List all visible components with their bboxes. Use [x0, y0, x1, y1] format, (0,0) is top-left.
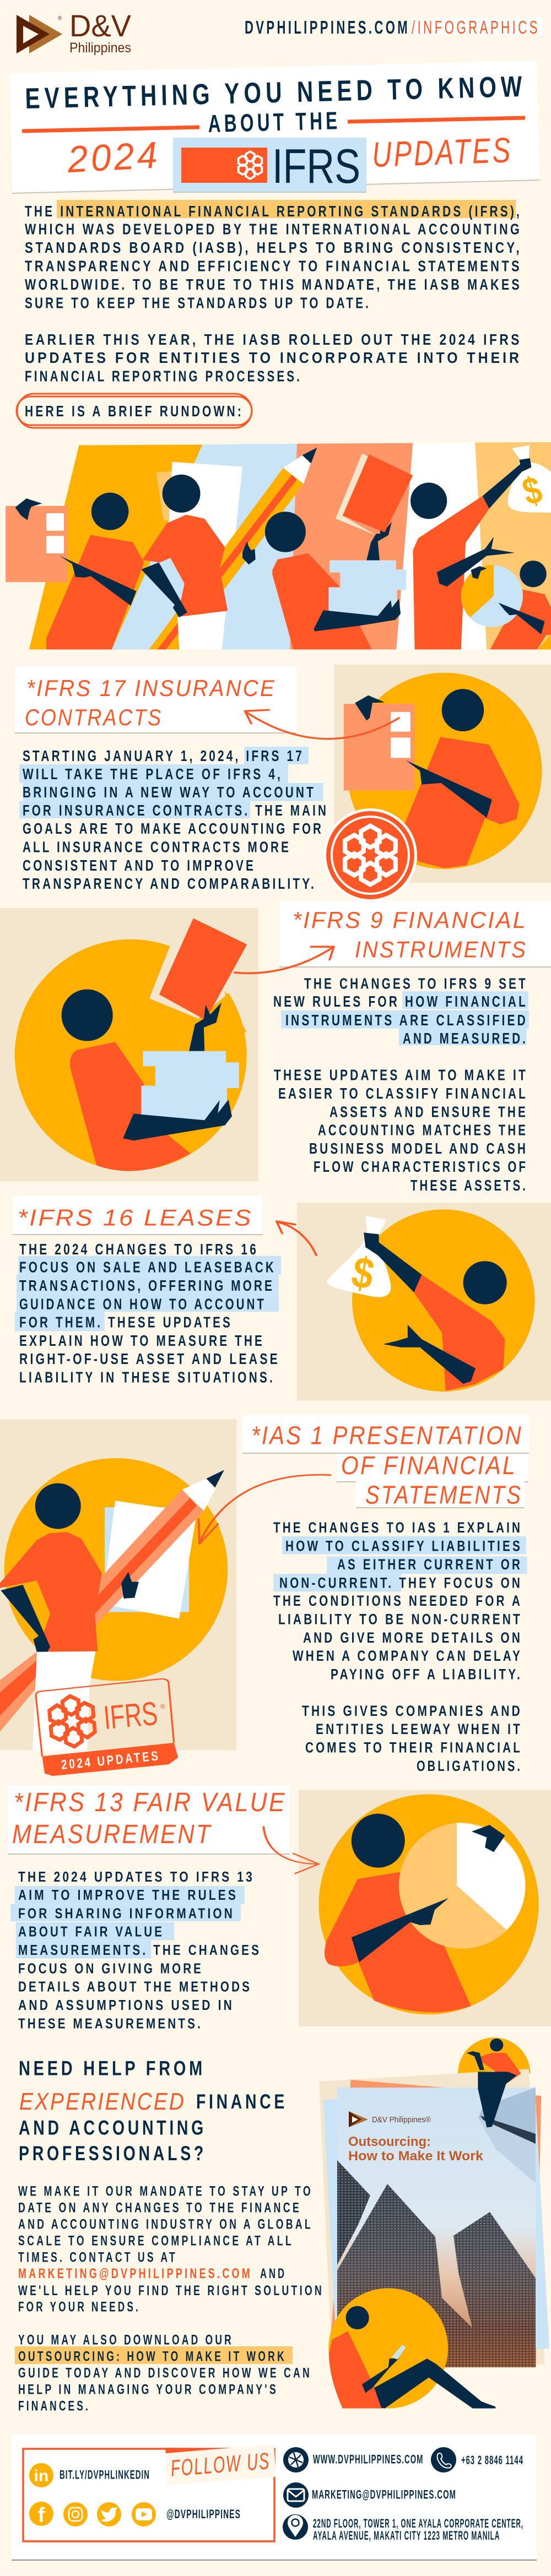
panel: IFRS 13 illustration — [299, 1790, 551, 2026]
cta text: HELP IN MANAGING YOUR COMPANY'S — [18, 2382, 278, 2398]
heading card: IFRS 9 financial instruments: *IFRS 9 FINANCIAL — [293, 907, 527, 933]
heading card: IFRS 17 insurance contracts: CONTRACTS — [25, 704, 163, 730]
cta heading: FINANCE — [196, 2090, 288, 2113]
social frame — [23, 2444, 276, 2541]
title line: about the: ABOUT THE — [208, 106, 341, 138]
heading card: IFRS 16 leases — [13, 1195, 263, 1235]
cta text: WE MAKE IT OUR MANDATE TO STAY UP TO — [18, 2184, 313, 2199]
logo: D&V Philippines: Philippines — [69, 40, 131, 56]
text: IFRS 16: FOCUS ON SALE AND LEASEBACK — [19, 1259, 276, 1275]
intro text — [25, 200, 522, 384]
person 1 — [6, 493, 144, 649]
panel: IFRS 16 illustration: $ — [348, 1247, 378, 1299]
text: IFRS 13: ABOUT FAIR VALUE — [18, 1923, 164, 1939]
cta heading — [19, 2057, 288, 2165]
text: IFRS 16: EXPLAIN HOW TO MEASURE THE — [19, 1332, 264, 1349]
arrow: IFRS 16 — [277, 1221, 316, 1256]
person 3 with book and boxes — [265, 454, 413, 649]
heading card: IFRS 17 insurance contracts — [15, 667, 296, 733]
person 5 with pie chart — [461, 561, 551, 649]
heading card: IAS 1 presentation of financial statements — [242, 1415, 529, 1509]
person 4 with money bag — [410, 445, 551, 649]
title: IFRS logo box: IFRS — [272, 139, 360, 193]
heading card: IAS 1 presentation of financial statements: OF FINANCIAL — [341, 1451, 517, 1480]
heading card: IFRS 16 leases: *IFRS 16 LEASES — [18, 1205, 253, 1230]
text: IFRS 13: AND ASSUMPTIONS USED IN — [18, 1997, 234, 2013]
cta heading: EXPERIENCED — [19, 2088, 186, 2115]
stamp: IFRS 2024 updates: 2024 UPDATES — [61, 1748, 161, 1773]
cta text: AND ACCOUNTING INDUSTRY ON A GLOBAL — [18, 2217, 313, 2232]
heading card: IFRS 13 fair value measurement: MEASUREMENT — [12, 1820, 212, 1849]
heading card: IFRS 13 fair value measurement: *IFRS 13 FAIR VALUE — [14, 1788, 287, 1817]
contact details: MARKETING@DVPHILIPPINES.COM — [312, 2488, 456, 2501]
text: IFRS 13: AIM TO IMPROVE THE RULES — [18, 1887, 238, 1903]
social frame: BIT.LY/DVPHLINKEDIN — [60, 2468, 150, 2481]
social frame: in — [34, 2467, 48, 2485]
cta text — [15, 2184, 324, 2414]
person 2 — [141, 475, 256, 649]
social frame: FOLLOW US — [170, 2448, 271, 2481]
text: IFRS 13: DETAILS ABOUT THE METHODS — [18, 1978, 252, 1995]
panel: IAS 1 illustration — [0, 1420, 236, 1750]
arrow: IAS 1 — [198, 1475, 331, 1544]
text: IFRS 16 — [15, 1241, 281, 1385]
panel: IFRS 16 illustration — [297, 1203, 551, 1401]
text: IFRS 13: FOCUS ON GIVING MORE — [18, 1960, 203, 1977]
stamp: IFRS 2024 updates: IFRS — [102, 1695, 159, 1736]
logo: D&V Philippines: D&V — [69, 8, 132, 43]
text: IFRS 13: MEASUREMENTS. THE CHANGES — [18, 1942, 261, 1958]
callout: here is a brief rundown — [17, 394, 252, 428]
text: IFRS 17: STARTING JANUARY 1, 2024, IFRS 17 — [23, 747, 304, 764]
cta text: TIMES. CONTACT US AT — [18, 2250, 177, 2265]
text: IFRS 13 — [10, 1868, 261, 2032]
title line: about the — [22, 106, 525, 138]
logo: D&V Philippines: ® — [58, 15, 62, 21]
panel: IFRS 17 illustration — [334, 665, 551, 883]
title: updates: UPDATES — [371, 130, 513, 175]
text: IFRS 17: WILL TAKE THE PLACE OF IFRS 4, — [23, 765, 283, 782]
contact details — [283, 2447, 523, 2542]
heading card: IFRS 13 fair value measurement — [8, 1786, 290, 1855]
panel: IFRS 9 illustration — [0, 908, 258, 1182]
social frame: @DVPHILIPPINES — [166, 2507, 241, 2521]
cta text: MARKETING@DVPHILIPPINES.COM — [18, 2266, 252, 2281]
cta text: FINANCES. — [18, 2399, 90, 2414]
text: IFRS 16: THE 2024 CHANGES TO IFRS 16 — [19, 1241, 258, 1258]
cta heading: PROFESSIONALS? — [19, 2142, 207, 2165]
guide cover illustration — [319, 2037, 549, 2409]
contact details: WWW.DVPHILIPPINES.COM — [313, 2453, 423, 2466]
text: IFRS 16: FOR THEM. THESE UPDATES — [19, 1314, 233, 1330]
intro text: SURE TO KEEP THE STANDARDS UP TO DATE. — [25, 294, 371, 312]
text: IFRS 16: RIGHT-OF-USE ASSET AND LEASE — [19, 1350, 280, 1367]
text: IFRS 17: TRANSPARENCY AND COMPARABILITY. — [23, 875, 316, 892]
text: IFRS 13: THESE MEASUREMENTS. — [18, 2015, 203, 2032]
cta text: DATE ON ANY CHANGES TO THE FINANCE — [18, 2200, 301, 2216]
arrow: IFRS 9 — [235, 947, 334, 973]
callout: here is a brief rundown: HERE IS A BRIEF RUNDOWN: — [25, 403, 244, 420]
text: IFRS 17: ALL INSURANCE CONTRACTS MORE — [23, 838, 291, 856]
cta text: FOR YOUR NEEDS. — [18, 2300, 141, 2315]
text: IFRS 16: LIABILITY IN THESE SITUATIONS. — [19, 1369, 275, 1385]
text: IFRS 13: FOR SHARING INFORMATION — [18, 1905, 235, 1922]
website url: DVPHILIPPINES.COM — [245, 17, 410, 37]
cta text: YOU MAY ALSO DOWNLOAD OUR — [18, 2333, 234, 2348]
hero illustration: people with documents — [6, 442, 551, 649]
cover photo of towers: Outsourcing: — [348, 2134, 431, 2149]
arrow: IFRS 17 — [245, 710, 399, 739]
seated figures — [328, 2039, 521, 2409]
cover photo of towers: D&V Philippines® — [372, 2115, 431, 2124]
text: IFRS 17 — [19, 747, 328, 892]
cover photo of towers — [337, 2088, 536, 2367]
text: IFRS 17: BRINGING IN A NEW WAY TO ACCOUNT — [23, 784, 316, 801]
cta text: SCALE TO ENSURE COMPLIANCE AT ALL — [18, 2233, 294, 2249]
text: IFRS 9 — [273, 975, 529, 1194]
title: 2024: 2024 — [66, 134, 161, 181]
logo: D&V Philippines — [17, 8, 132, 56]
social frame: f — [38, 2504, 45, 2527]
cta text: GUIDE TODAY AND DISCOVER HOW WE CAN — [18, 2366, 312, 2381]
cta heading: AND ACCOUNTING — [19, 2117, 207, 2139]
text: IFRS 17: FOR INSURANCE CONTRACTS. THE MAIN — [23, 802, 328, 819]
cta text: OUTSOURCING: HOW TO MAKE IT WORK — [18, 2349, 287, 2365]
title: IFRS logo box — [173, 138, 366, 193]
heading card: IFRS 9 financial instruments: INSTRUMENTS — [355, 936, 527, 963]
heading card: IAS 1 presentation of financial statements: STATEMENTS — [365, 1480, 522, 1509]
cover backing sheets — [319, 2037, 549, 2367]
cta text: WE'LL HELP YOU FIND THE RIGHT SOLUTION — [18, 2283, 324, 2298]
heading card: IFRS 17 insurance contracts: *IFRS 17 INSURANCE — [26, 675, 276, 701]
arrow: IFRS 13 — [263, 1827, 318, 1873]
text: IFRS 13: THE 2024 UPDATES TO IFRS 13 — [18, 1868, 255, 1885]
cta heading: NEED HELP FROM — [19, 2057, 206, 2079]
text: IFRS 16: TRANSACTIONS, OFFERING MORE — [19, 1277, 274, 1294]
seal: IFRS emblem — [323, 808, 417, 902]
text: IFRS 17: GOALS ARE TO MAKE ACCOUNTING FOR — [23, 820, 323, 837]
cta text: AND — [260, 2266, 287, 2281]
intro text: FINANCIAL REPORTING PROCESSES. — [25, 368, 302, 384]
title card — [9, 61, 540, 194]
heading card: IFRS 9 financial instruments — [279, 901, 551, 968]
stamp: IFRS 2024 updates — [36, 1679, 178, 1776]
text: IFRS 17: CONSISTENT AND TO IMPROVE — [23, 857, 256, 874]
text: IFRS 16: GUIDANCE ON HOW TO ACCOUNT — [19, 1295, 266, 1313]
text: IAS 1 — [273, 1519, 527, 1774]
cover photo of towers: How to Make It Work — [348, 2149, 484, 2164]
stamp: IFRS 2024 updates: ® — [160, 1703, 165, 1710]
footer card — [12, 2435, 537, 2561]
